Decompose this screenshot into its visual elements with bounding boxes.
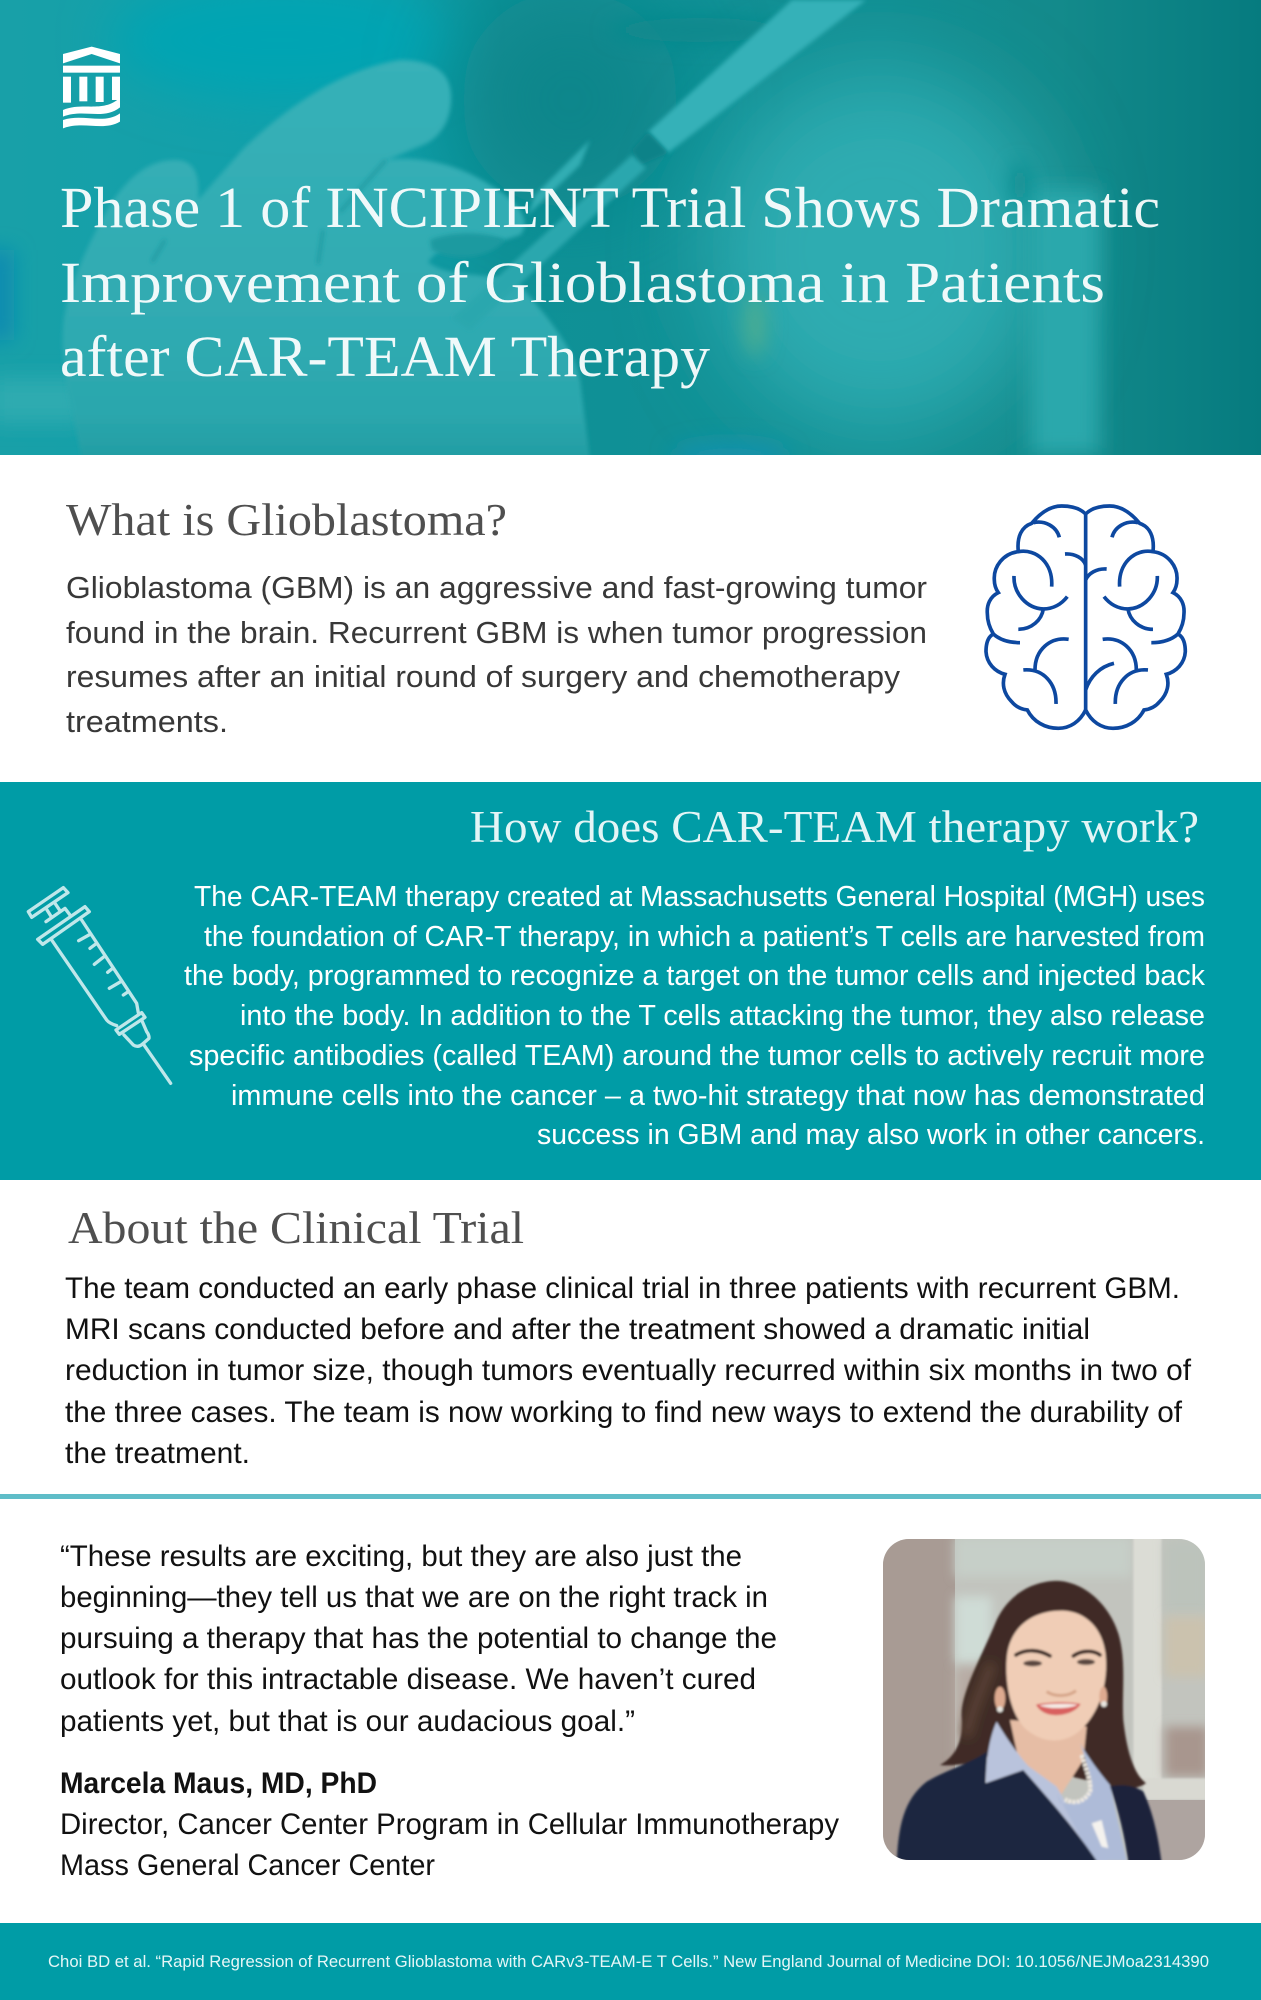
- text block: CAR-TEAM explanation: the body, programmed to recognize a target on the tumor cells and injected back: [184, 960, 1206, 992]
- panel: about the clinical trial: [65, 1203, 1192, 1470]
- icon: hospital logo: [63, 47, 120, 128]
- text block: clinical trial description: the three cases. The team is now working to find new ways to extend the durability of: [65, 1396, 1183, 1429]
- text block: attribution: Marcela Maus, MD, PhD: [60, 1767, 377, 1800]
- text block: quote: “These results are exciting, but they are also just the: [60, 1540, 742, 1573]
- heading: what is glioblastoma: What is Glioblastoma?: [66, 495, 507, 545]
- text block: glioblastoma definition: resumes after an initial round of surgery and chemotherapy: [66, 659, 901, 694]
- brows, eyes: [1016, 1651, 1100, 1656]
- panel: how does CAR-TEAM therapy work: [0, 782, 1261, 1180]
- hair: [940, 1581, 1146, 1790]
- text block: quote: patients yet, but that is our audacious goal.”: [60, 1705, 635, 1738]
- face: [1006, 1611, 1106, 1740]
- header photo: gloved hand and pipette: [0, 0, 1261, 469]
- pearls: [1065, 1755, 1090, 1802]
- text block: glioblastoma definition: [66, 570, 927, 739]
- text block: clinical trial description: MRI scans conducted before and after the treatment showed a dramatic initial: [65, 1313, 1090, 1346]
- title: [60, 175, 1160, 389]
- text block: glioblastoma definition: treatments.: [66, 704, 228, 739]
- text block: CAR-TEAM explanation: the foundation of CAR-T therapy, in which a patient’s T cells are harvested from: [204, 921, 1205, 953]
- text block: CAR-TEAM explanation: immune cells into the cancer – a two-hit strategy that now has demonstrated: [231, 1080, 1205, 1112]
- icon: syringe: [28, 888, 171, 1083]
- text block: attribution: Director, Cancer Center Program in Cellular Immunotherapy: [60, 1808, 839, 1841]
- panel: header: [0, 0, 1261, 469]
- text block: CAR-TEAM explanation: [184, 881, 1206, 1151]
- text block: quote: pursuing a therapy that has the potential to change the: [60, 1622, 777, 1655]
- heading: about the clinical trial: About the Clinical Trial: [68, 1203, 524, 1253]
- title: Improvement of Glioblastoma in Patients: [60, 250, 1105, 315]
- panel: quote: [60, 1537, 1210, 1882]
- panel: what is glioblastoma: [66, 495, 1185, 739]
- text block: clinical trial description: reduction in tumor size, though tumors eventually recurred within six months in two of: [65, 1354, 1192, 1387]
- collar and shirt: [984, 1720, 1080, 1840]
- text block: glioblastoma definition: Glioblastoma (GBM) is an aggressive and fast-growing tumor: [66, 570, 927, 605]
- text block: quote: [60, 1540, 777, 1738]
- jacket: [897, 1752, 1098, 1863]
- text block: CAR-TEAM explanation: into the body. In addition to the T cells attacking the tumor, they also release: [240, 1000, 1205, 1032]
- text block: quote: beginning—they tell us that we are on the right track in: [60, 1581, 768, 1614]
- text block: clinical trial description: The team conducted an early phase clinical trial in three patients with recurrent GBM.: [65, 1272, 1180, 1305]
- citation: Choi BD et al. “Rapid Regression of Recurrent Glioblastoma with CARv3-TEAM-E T Cells.” New England Journal of Medicine DOI: 10.1056/NEJMoa2314390: [48, 1952, 1209, 1971]
- text block: glioblastoma definition: found in the brain. Recurrent GBM is when tumor progression: [66, 615, 927, 650]
- text block: quote: outlook for this intractable disease. We haven’t cured: [60, 1663, 756, 1696]
- neck: [1010, 1720, 1087, 1797]
- text block: CAR-TEAM explanation: specific antibodies (called TEAM) around the tumor cells to actively recruit more: [189, 1040, 1205, 1072]
- title: after CAR-TEAM Therapy: [60, 324, 710, 389]
- text block: CAR-TEAM explanation: The CAR-TEAM therapy created at Massachusetts General Hospital (MGH) uses: [194, 881, 1205, 913]
- text block: attribution: Mass General Cancer Center: [60, 1849, 435, 1882]
- mouth: [1036, 1702, 1081, 1715]
- glove: [63, 60, 590, 460]
- text block: CAR-TEAM explanation: success in GBM and may also work in other cancers.: [537, 1119, 1205, 1151]
- text block: clinical trial description: the treatment.: [65, 1437, 250, 1470]
- icon: brain: [986, 506, 1185, 728]
- title: Phase 1 of INCIPIENT Trial Shows Dramatic: [60, 175, 1160, 240]
- panel: footer citation: [0, 1923, 1261, 2000]
- text block: clinical trial description: [65, 1272, 1192, 1470]
- text block: attribution: [60, 1767, 839, 1882]
- photo: portrait of Marcela Maus: [880, 1537, 1210, 1867]
- heading: how does CAR-TEAM therapy work: How does CAR-TEAM therapy work?: [470, 802, 1199, 852]
- pipette: [648, 0, 866, 153]
